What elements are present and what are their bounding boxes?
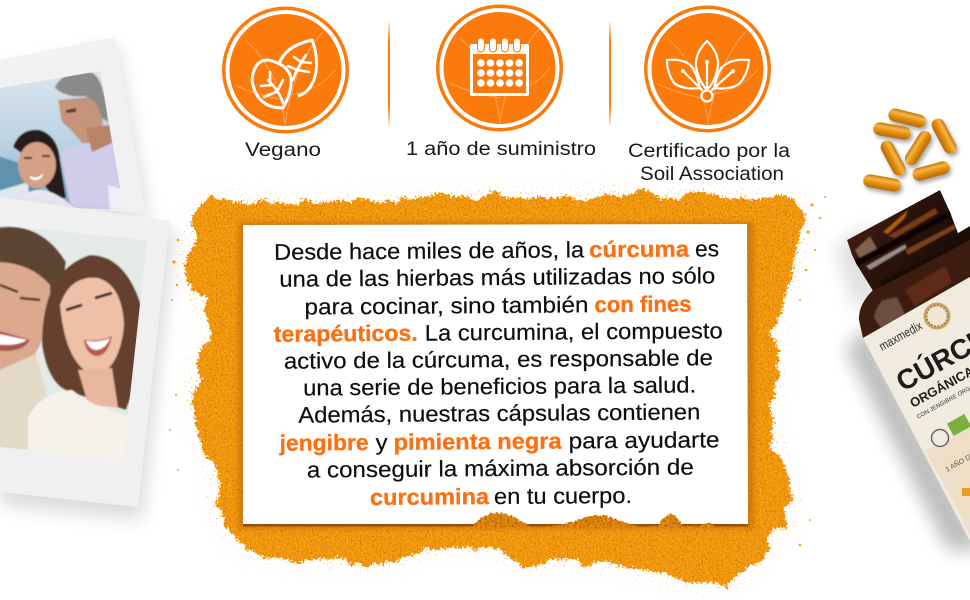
turmeric powder frame [169,195,826,587]
main text: pimienta negra [393,428,562,455]
divider [609,22,611,126]
label: certificado: Certificado por la [628,141,790,162]
main text: una de las hierbas más utilizadas no sólo [279,263,715,292]
main text: y [375,430,388,455]
capsules [862,107,961,196]
white text panel [238,222,754,529]
main text: con fines [594,291,692,317]
main text: es [695,236,719,261]
icon: calendar [436,4,563,132]
main text: cúrcuma [589,236,690,262]
main text: terapéuticos. [274,321,418,347]
label: 1 año de suministro: 1 año de suministro [406,139,596,160]
main text: jengibre [278,430,369,456]
icon: vegan leaves [222,6,349,134]
polaroid photo: senior couple [0,37,150,225]
main text: una serie de beneficios para la salud. [303,372,696,401]
brand name: maxmedix [877,318,925,354]
main text: a conseguir la máxima absorción de [307,454,694,483]
main text: en tu cuerpo. [494,483,632,509]
main text: activo de la cúrcuma, es responsable de [284,345,713,374]
label: certificado: Soil Association [640,164,784,185]
bottle [835,190,970,550]
main text: Además, nuestras cápsulas contienen [298,399,700,428]
EU organic badge [947,414,970,436]
main text: para cocinar, sino también [304,292,589,320]
main text: La curcumina, el compuesto [425,318,723,346]
powder mounds on bottom edge [470,513,720,528]
label: certificado [628,141,790,185]
main text [273,236,724,511]
main text: para ayudarte [568,427,720,453]
loose powder specks [169,196,826,546]
divider [388,22,390,126]
bottle neck [847,190,970,291]
brand logo [924,302,950,330]
label: vegano: Vegano [245,140,321,161]
soil association badge [932,430,948,446]
icon: soil association plant [644,6,771,132]
main text: Desde hace miles de años, la [274,237,585,265]
product label [863,277,970,545]
polaroid photo: young couple [0,197,174,520]
bottle body [859,238,970,338]
main text: curcumina [370,484,490,510]
